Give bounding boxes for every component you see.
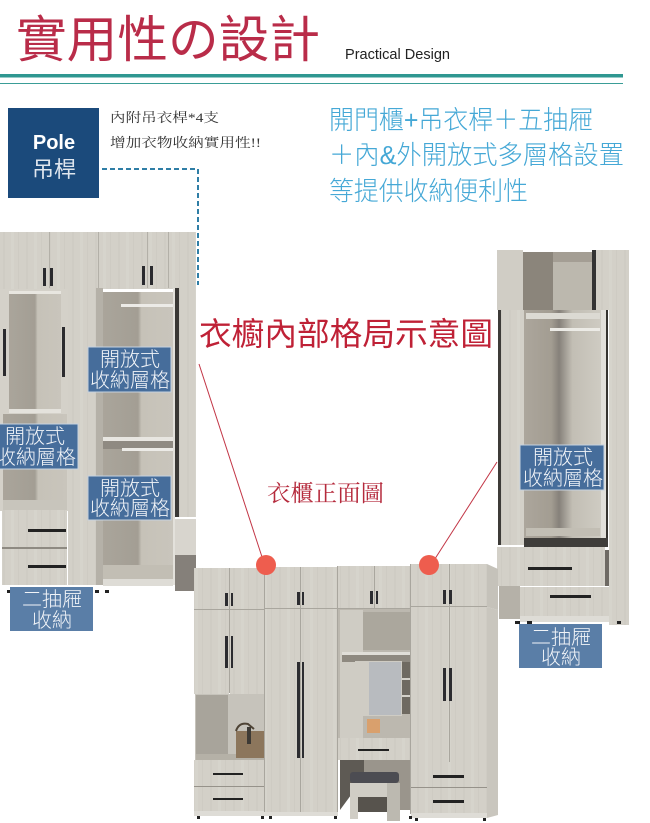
callout lines and markers [199, 364, 497, 575]
open doors [498, 310, 501, 545]
pole label: Pole [33, 132, 75, 154]
right side panel [487, 607, 498, 818]
label: open shelves, right wardrobe: 開放式 [533, 446, 593, 469]
connector: pole dashed line [102, 169, 198, 285]
subtitle: Practical Design [345, 47, 450, 63]
label: two drawers, left [10, 587, 93, 632]
vanity drawer [338, 738, 410, 760]
left upper door [194, 610, 229, 694]
label: open shelves, left compartment: 開放式 [5, 425, 65, 448]
heading: interior layout: 衣櫥內部格局示意圖 [199, 316, 493, 352]
stool [350, 772, 400, 823]
label: open shelves, lower: 開放式 [100, 477, 160, 500]
labels: open shelves, left wardrobe: 開放式 [100, 348, 160, 371]
label: two drawers, right: 二抽屜 [531, 626, 591, 649]
mirror [355, 661, 410, 716]
feature description: 等提供收納便利性 [329, 176, 528, 206]
pole label chinese: 吊桿 [32, 157, 76, 182]
door and cabinet handles [225, 590, 452, 758]
dark knee space [340, 760, 410, 810]
tall middle door [265, 609, 300, 812]
header rule [0, 74, 623, 84]
open door [68, 288, 103, 585]
cabinet seams [194, 564, 487, 814]
right door [173, 289, 196, 517]
left drawers [194, 760, 264, 786]
open display niche [195, 694, 264, 760]
left drawers [2, 510, 67, 547]
panel: left open wardrobe [0, 232, 196, 593]
panel: front view wardrobe [194, 564, 498, 823]
label: open shelves, right wardrobe [520, 445, 604, 490]
label: two drawers, left: 收納 [32, 609, 72, 632]
drawers [524, 538, 608, 547]
labels: open shelves, left wardrobe: 收納層格 [90, 369, 170, 392]
interior of right compartment [103, 292, 173, 565]
pole description: 內附吊衣桿*4支 [110, 110, 219, 125]
main compartment [524, 310, 602, 538]
top compartment [497, 250, 523, 310]
feature description [329, 105, 624, 206]
label: open shelves, right wardrobe: 收納層格 [523, 467, 603, 490]
label: open shelves, left compartment [0, 424, 78, 469]
feature description: ＋內&外開放式多層格設置 [329, 140, 624, 170]
top cabinets [0, 232, 196, 289]
perfume bottles [367, 719, 380, 733]
label: two drawers, left: 二抽屜 [22, 588, 82, 611]
pole description: 增加衣物收納實用性!! [110, 135, 261, 150]
feet [7, 590, 109, 593]
title: 實用性の設計 [16, 12, 320, 68]
label: two drawers, right [519, 624, 602, 669]
panel: right open wardrobe [497, 250, 629, 625]
panel: pole badge [8, 108, 99, 198]
right drawers [411, 762, 487, 787]
labels: open shelves, left wardrobe [88, 347, 171, 392]
pole description [110, 110, 261, 150]
label: two drawers, right: 收納 [541, 646, 581, 669]
interior of left compartment [0, 289, 68, 511]
heading: front view: 衣櫃正面圖 [267, 481, 384, 506]
right wardrobe door [411, 607, 449, 762]
icon: handbag [236, 724, 264, 758]
hanging rods [121, 304, 173, 307]
label: open shelves, lower [88, 476, 171, 520]
label: open shelves, lower: 收納層格 [90, 497, 170, 520]
vanity recess [338, 609, 410, 739]
feet [515, 621, 621, 624]
upper handles [43, 266, 153, 286]
feet [197, 816, 486, 821]
top cabinets [194, 568, 264, 610]
feature description: 開門櫃+吊衣桿＋五抽屜 [329, 105, 593, 135]
